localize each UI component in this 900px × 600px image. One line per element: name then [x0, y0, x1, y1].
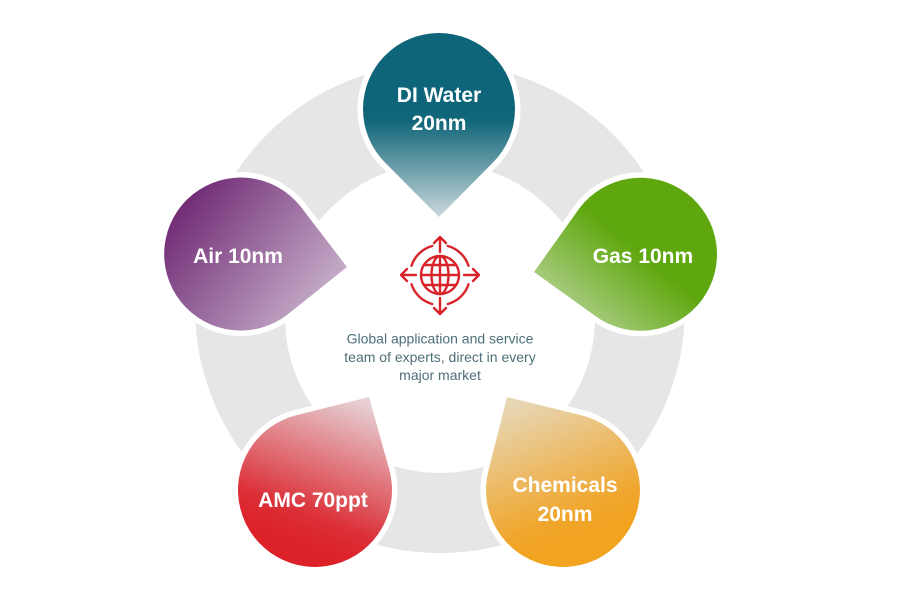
drop: AMC 70ppt: [238, 397, 392, 567]
drop: Air 10nm: [164, 178, 347, 331]
drop: Air 10nm: Air 10nm: [193, 245, 283, 268]
drop: Gas 10nm: Gas 10nm: [593, 245, 693, 268]
caption text: team of experts, direct in every: [344, 349, 536, 365]
caption text: [344, 330, 536, 383]
caption text: major market: [399, 367, 481, 383]
drop: AMC 70ppt: AMC 70ppt: [258, 489, 368, 512]
drop: DI Water 20nm: [363, 33, 515, 217]
caption text: Global application and service: [347, 330, 534, 346]
drop: Gas 10nm: [534, 178, 717, 331]
drop: Chemicals 20nm: 20nm: [538, 503, 592, 526]
drop: DI Water 20nm: DI Water: [397, 84, 481, 107]
drop: DI Water 20nm: 20nm: [412, 112, 466, 135]
drop: Chemicals 20nm: [486, 397, 640, 567]
grey ring: [195, 63, 685, 553]
icon: globe with outward arrows: [401, 237, 479, 314]
drop: Chemicals 20nm: Chemicals: [512, 474, 618, 497]
